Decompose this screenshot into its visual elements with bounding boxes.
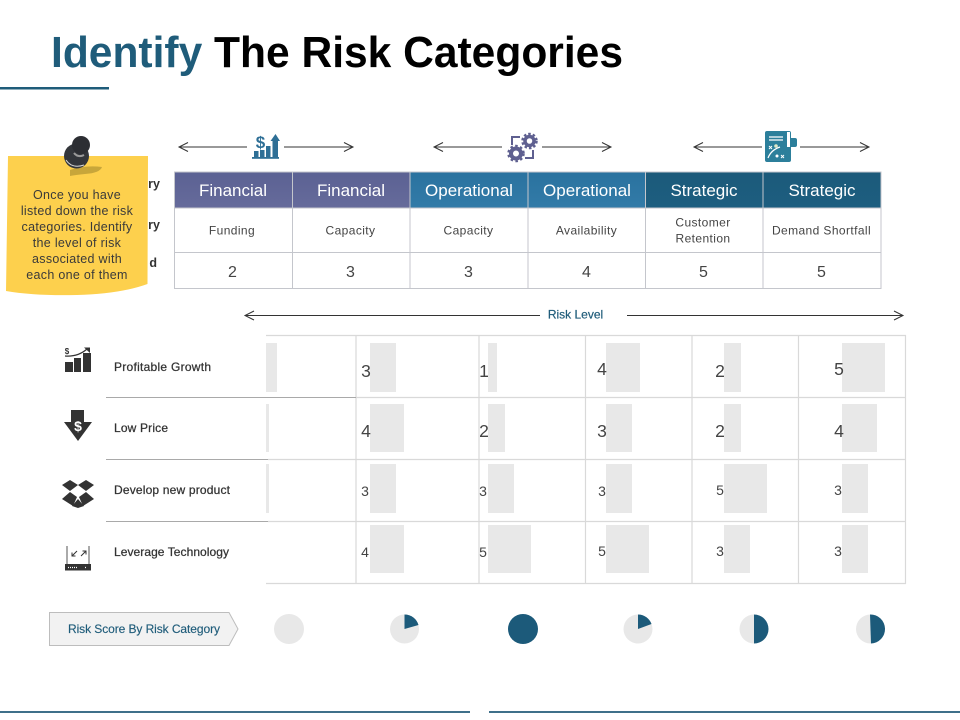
matrix values: 4 [597,359,607,379]
table header labels: Strategic [788,181,856,200]
callout text: each one of them [26,268,128,282]
arrow: financial span [179,142,353,152]
icon: push pin [64,136,90,168]
icon: gears [508,134,536,161]
table sub-category row: Capacity [326,224,375,238]
row label: low price: Low Price [114,421,168,435]
table sub-category row: Retention [676,232,730,246]
table header labels [199,181,856,200]
pie: operational availability [624,614,652,644]
table likelihood row: 5 [699,264,708,281]
arrow: strategic span [694,142,869,152]
table header cells [174,172,881,208]
matrix values: 3 [716,543,724,559]
matrix values: 1 [479,361,489,381]
icon: low price arrow: $ [74,418,82,434]
matrix values: 3 [834,543,842,559]
matrix values: 4 [834,421,844,441]
footer rule right [489,711,960,713]
matrix values: 5 [598,543,606,559]
pie: operational capacity [508,614,538,644]
table header labels: Strategic [670,181,738,200]
matrix values: 2 [715,361,725,381]
table sub-category row: Capacity [444,224,493,238]
icon: pin shadow [70,166,102,176]
matrix values: 5 [479,544,487,560]
matrix values: 3 [598,483,606,499]
risk score label: Risk Score By Risk Category [68,622,220,636]
table likelihood row: 5 [817,264,826,281]
table sub-category row: Demand Shortfall [772,224,871,238]
icon: strategy scroll [765,131,797,162]
matrix values: 4 [361,544,369,560]
arrow: risk level [245,308,903,322]
matrix values: 3 [834,482,842,498]
row label: leverage technology: Leverage Technology [114,545,229,559]
icon: low price arrow [64,410,92,441]
table header labels: Operational [543,181,631,200]
row separators [106,398,356,522]
table likelihood row: 2 [228,264,237,281]
table likelihood row: 3 [346,264,355,281]
callout text: Once you have [33,188,121,202]
callout text: associated with [32,252,122,266]
table header labels: Financial [199,181,267,200]
callout: sticky note [6,136,148,295]
row labels partly hidden behind note: d [149,256,157,270]
matrix values: 3 [361,361,371,381]
table likelihood row: 4 [582,264,591,281]
pie: strategic retention [740,614,768,644]
icon: technology router [65,546,91,570]
table header labels: Operational [425,181,513,200]
footer rule left [0,711,470,713]
icon: financial growth: $ [256,133,266,152]
pie: financial capacity [390,614,419,644]
row labels partly hidden behind note: ry [148,218,160,232]
row label: develop new product: Develop new product [114,483,231,497]
icon: profitable growth [65,347,91,372]
pie: strategic shortfall [856,614,885,644]
icon: open box [62,480,94,508]
matrix values [361,359,844,560]
callout text: listed down the risk [21,204,134,218]
matrix values: 4 [361,421,371,441]
pie: financial funding [274,614,304,644]
row labels partly hidden behind note: ry [148,177,160,191]
callout text: the level of risk [33,236,122,250]
callout text [21,188,134,282]
matrix values: 3 [597,421,607,441]
panel: risk category table [174,172,881,288]
table header labels: Financial [317,181,385,200]
callout text: categories. Identify [22,220,133,234]
table likelihood row [228,264,826,281]
risk score label [50,612,238,646]
matrix grid [266,336,906,584]
matrix values: 3 [361,483,369,499]
table likelihood row: 3 [464,264,473,281]
table sub-category row: Availability [556,224,617,238]
matrix values: 2 [479,421,489,441]
matrix values: 5 [716,482,724,498]
table sub-category row: Funding [209,224,255,238]
matrix bars [266,343,885,573]
row label: profitable growth: Profitable Growth [114,360,211,374]
title underline [0,87,109,90]
matrix values: 5 [834,359,844,379]
arrow: operational span [434,142,611,152]
table grid [174,172,881,288]
panel: risk matrix [106,336,906,584]
matrix values: 3 [479,483,487,499]
row labels partly hidden behind note [148,177,160,270]
title: Identify The Risk Categories [51,28,623,77]
matrix values: 2 [715,421,725,441]
table sub-category row [209,216,871,246]
table sub-category row: Customer [675,216,731,230]
icon: financial growth [252,133,280,159]
icon: profitable growth: $ [65,347,70,356]
risk level label: Risk Level [548,308,603,322]
